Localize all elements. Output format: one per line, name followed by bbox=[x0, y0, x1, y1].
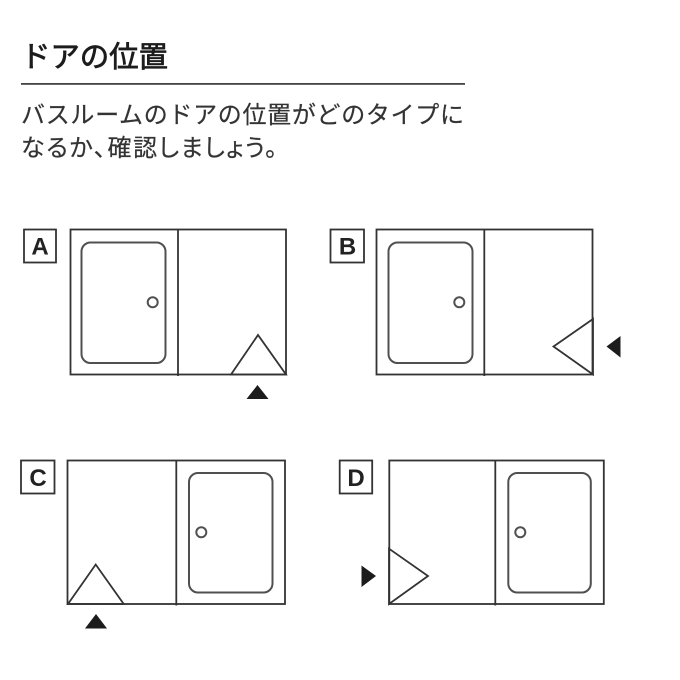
label A bbox=[24, 230, 56, 262]
arrow A bbox=[246, 385, 268, 399]
floor plan C bbox=[68, 460, 285, 606]
label C bbox=[21, 460, 54, 494]
arrow C bbox=[85, 614, 107, 628]
floor plan A bbox=[70, 230, 286, 376]
intro text: なるか、確認しましょう。 bbox=[21, 135, 277, 162]
floor plan D bbox=[389, 460, 604, 606]
title rule bbox=[21, 83, 465, 85]
panel D bbox=[340, 460, 604, 606]
label B: B bbox=[339, 234, 356, 260]
label D: D bbox=[347, 465, 365, 492]
label B bbox=[330, 230, 364, 262]
label A: A bbox=[31, 234, 49, 260]
panel A bbox=[24, 230, 286, 399]
label D bbox=[340, 460, 372, 494]
arrow D bbox=[362, 566, 376, 587]
intro text: バスルームのドアの位置がどのタイプに bbox=[21, 102, 464, 129]
intro text bbox=[21, 102, 464, 162]
panel B bbox=[330, 230, 620, 376]
title: ドアの位置 bbox=[21, 41, 168, 74]
label C: C bbox=[29, 465, 47, 492]
panel C bbox=[21, 460, 285, 628]
floor plan B bbox=[376, 230, 593, 376]
arrow B bbox=[606, 336, 620, 358]
